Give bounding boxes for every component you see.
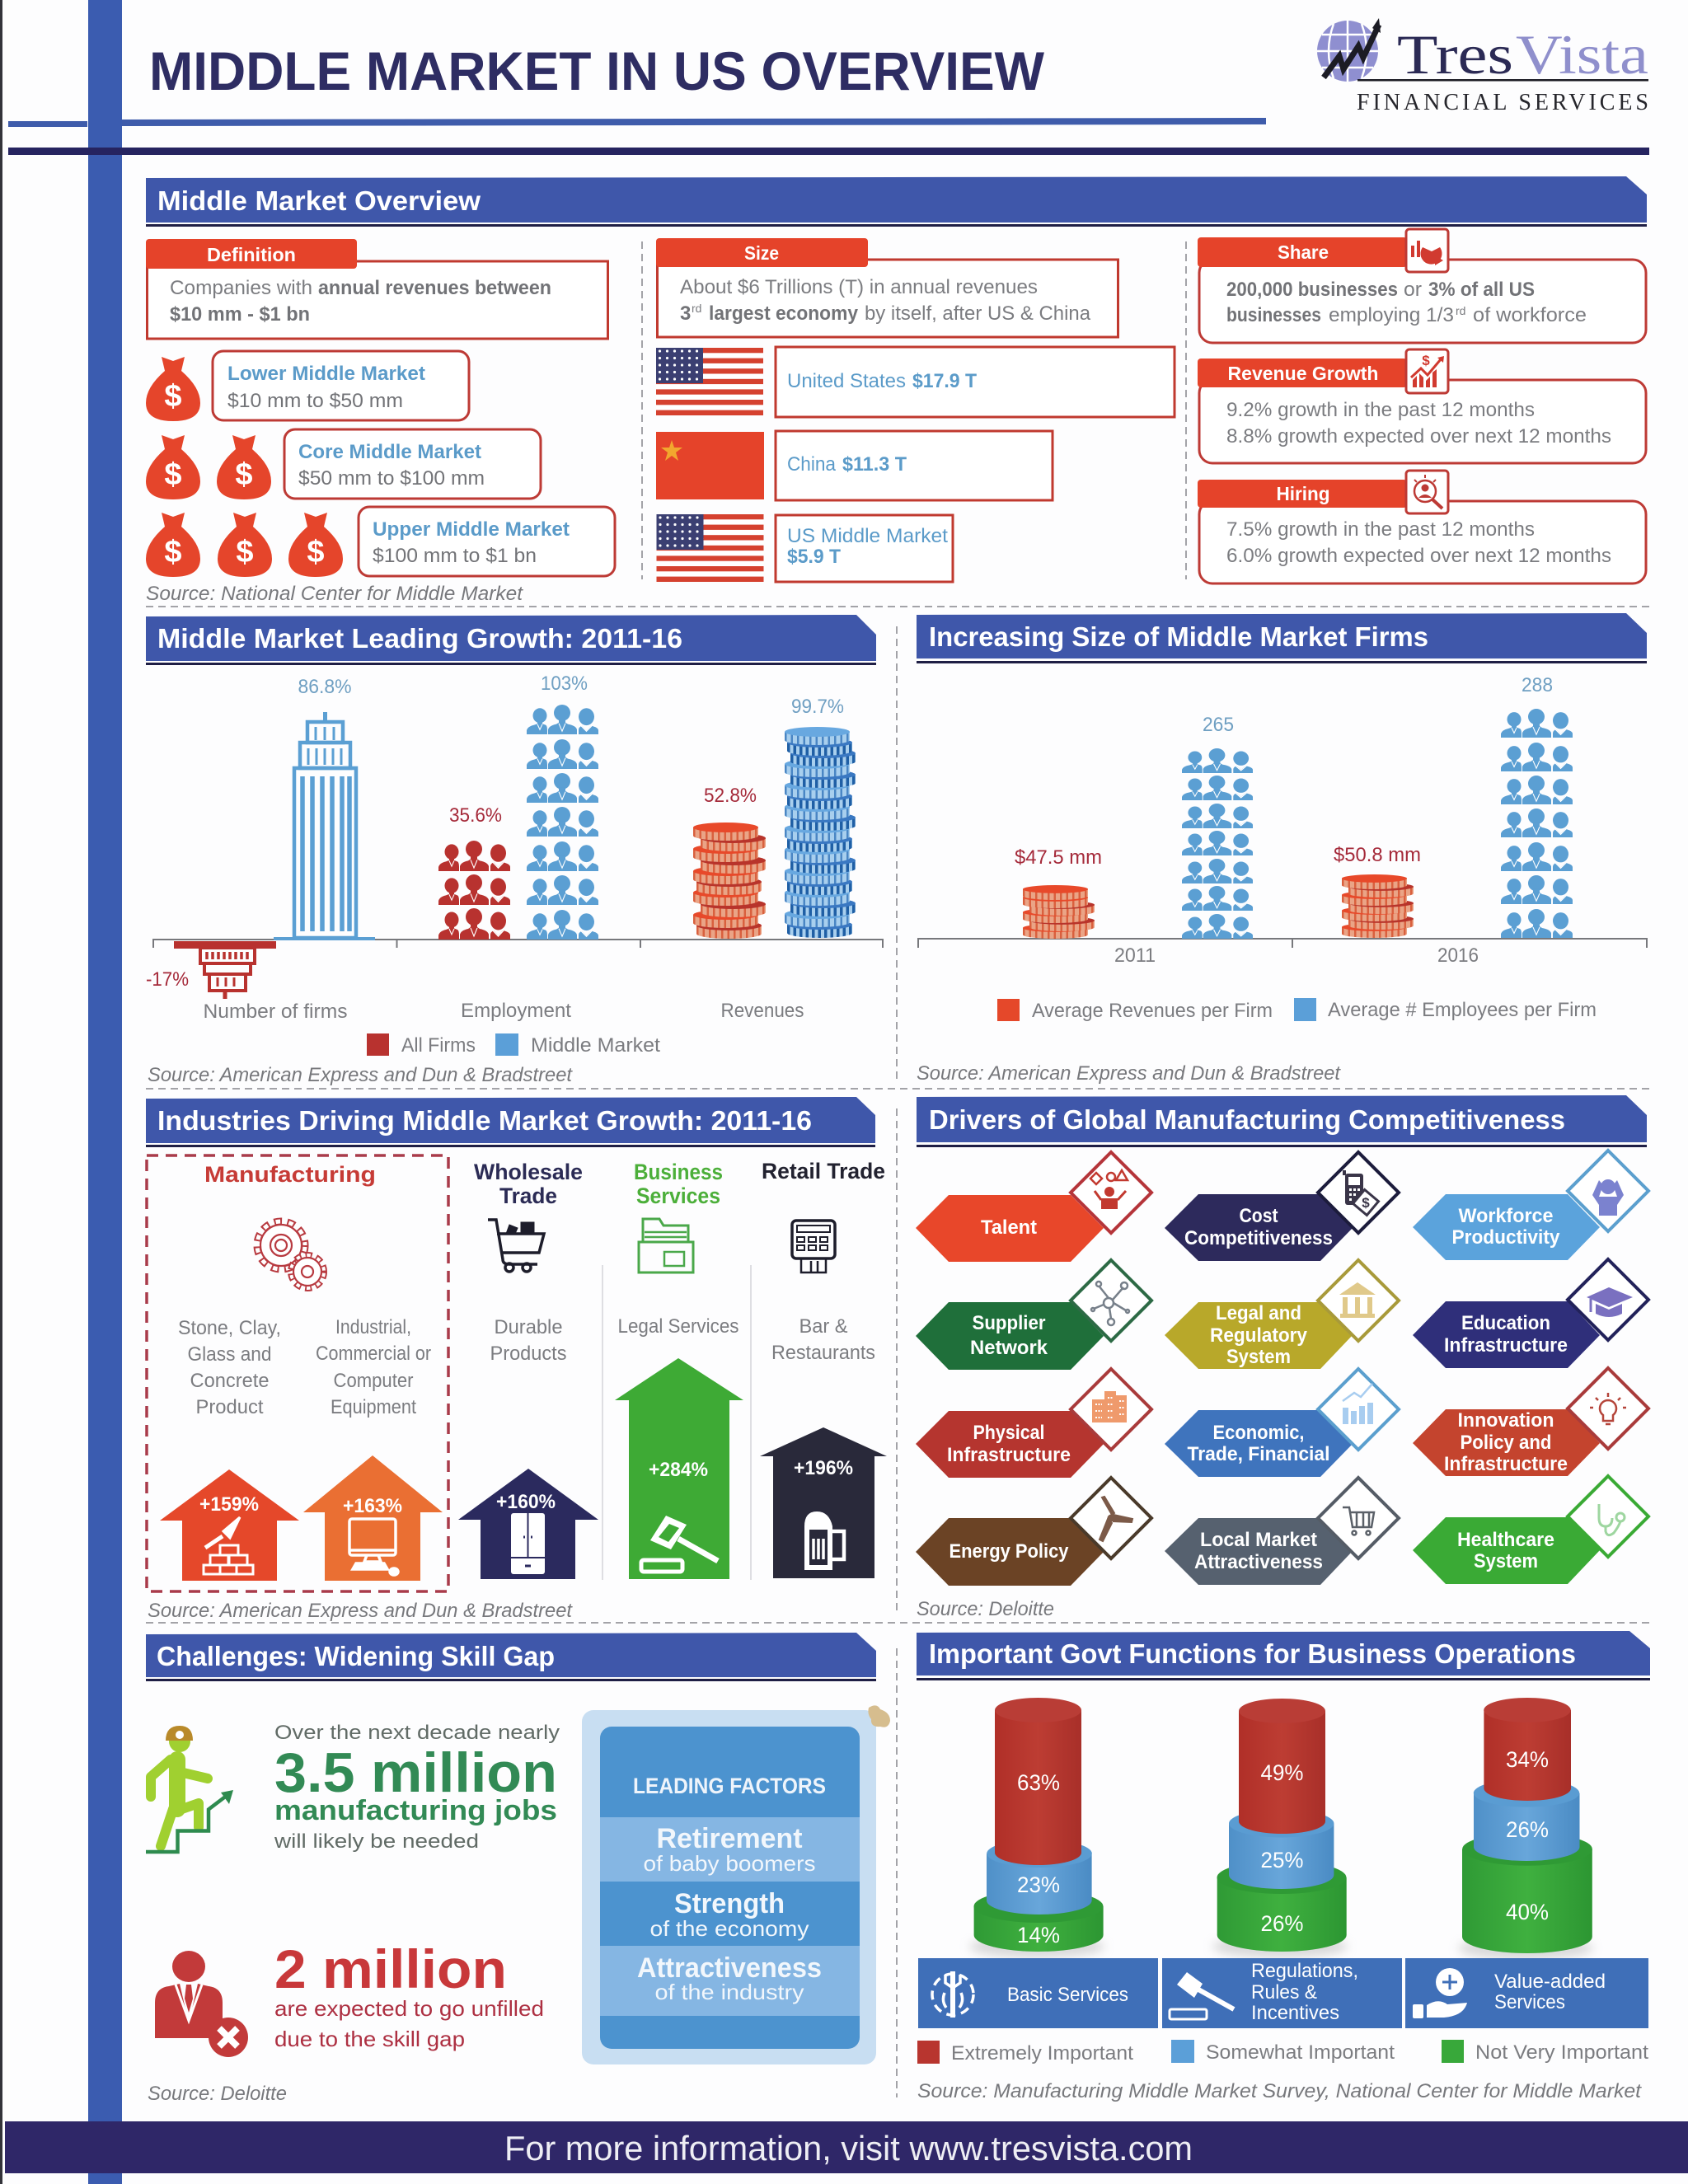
panel: size: largest economy — [709, 302, 859, 325]
panel: size — [656, 238, 1118, 337]
source: Source: Deloitte — [148, 2083, 287, 2105]
text block: 3.5 million jobs: will likely be needed — [274, 1830, 479, 1853]
panel: revenue growth: 8.8% growth expected over next 12 months — [1226, 425, 1611, 448]
panel: hiring: 6.0% growth expected over next 12 months — [1226, 545, 1611, 567]
text block: 2 million unfilled — [274, 1938, 544, 2051]
section: Middle Market Overview — [146, 176, 1647, 605]
heading: Business Services — [634, 1160, 723, 1208]
label: Regulations, Rules and Incentives — [1162, 1958, 1402, 2028]
driver: Talent — [916, 1152, 1151, 1262]
panel: leading factors: Attractiveness — [637, 1952, 822, 1984]
driver: Legal and Regulatory System — [1165, 1260, 1399, 1369]
panel: core middle market: $50 mm to $100 mm — [298, 467, 485, 490]
chart: Regulations stacked cylinders: 26% — [1261, 1911, 1304, 1936]
panel: size: by itself, after US & China — [865, 302, 1091, 325]
panel: share — [1198, 229, 1646, 343]
driver: Workforce Productivity — [1413, 1151, 1648, 1260]
legend: Somewhat Important — [1206, 2041, 1395, 2064]
driver: Workforce Productivity: Workforce — [1459, 1205, 1553, 1227]
category labels — [203, 1000, 804, 1023]
panel: share: Share — [1278, 241, 1329, 263]
text block: 3.5 million jobs: manufacturing jobs — [274, 1795, 557, 1826]
panel: upper middle market — [146, 507, 615, 577]
banner: Industries — [146, 1097, 875, 1147]
icon: globe with arrow — [1317, 18, 1381, 82]
panel: leading factors: of the economy — [649, 1916, 809, 1941]
panel: share: 3% of all US — [1428, 279, 1535, 301]
section: Increasing Size of Middle Market Firms — [917, 613, 1647, 1085]
panel: lower middle market: $10 mm to $50 mm — [227, 390, 403, 412]
icon: graduation cap — [1587, 1287, 1633, 1317]
driver: Legal and Regulatory System: Legal and — [1216, 1302, 1301, 1324]
panel: share: of workforce — [1473, 304, 1587, 326]
legend: All Firms — [401, 1034, 476, 1057]
heading: Wholesale Trade: Trade — [499, 1183, 557, 1208]
label: Value-added Services: Services — [1494, 1991, 1565, 2013]
text block: Stone, Clay, Glass and Concrete Product: Stone, Clay, — [178, 1317, 281, 1339]
driver: Education Infrastructure: Infrastructure — [1444, 1334, 1568, 1357]
panel: share: 200,000 businesses — [1226, 279, 1398, 301]
arrow: +159% — [160, 1469, 299, 1581]
panel: leading factors — [582, 1710, 876, 2064]
arrow: +284% — [615, 1358, 743, 1579]
icon: beer mug — [804, 1511, 844, 1570]
arrow: +160%: +160% — [496, 1491, 556, 1513]
pictogram: all firms revenue coins — [693, 823, 766, 939]
value label: 52.8% — [704, 785, 757, 807]
icon: card terminal — [792, 1221, 835, 1272]
panel: upper middle market: $ — [236, 535, 254, 569]
icon: inverted red building (-17%) — [176, 943, 274, 999]
value label: -17% — [146, 968, 189, 991]
panel: lower middle market — [146, 351, 469, 421]
panel: US Middle Market GDP: $5.9 T — [787, 546, 841, 568]
icon: grocery cart — [1343, 1507, 1374, 1535]
heading: Wholesale Trade — [474, 1160, 583, 1208]
value label: 86.8% — [298, 676, 351, 698]
icon: magnifier person — [1406, 471, 1448, 513]
section: Important Govt Functions for Business Operations — [917, 1631, 1650, 2102]
chart axis — [153, 940, 883, 948]
section: Middle Market Leading Growth chart — [146, 615, 883, 1086]
panel: hiring — [1198, 471, 1646, 583]
label: Value-added Services — [1405, 1958, 1648, 2028]
pictogram: middle market revenue coins — [785, 727, 856, 938]
panel: core middle market: $ — [235, 457, 253, 492]
label: Regulations, Rules and Incentives: Incentives — [1251, 2002, 1339, 2024]
pictogram: 2016 revenue coins — [1342, 874, 1414, 938]
title: MIDDLE MARKET IN US OVERVIEW — [149, 40, 1045, 101]
text block: Industrial, Commercial or Computer Equipment: Equipment — [331, 1396, 416, 1418]
text block: Bar and Restaurants: Bar & — [799, 1315, 847, 1338]
arrow: +196% — [760, 1427, 887, 1578]
panel: leading factors: of the industry — [654, 1980, 804, 2004]
panel: leading factors: Retirement — [656, 1823, 803, 1854]
panel: hiring: 7.5% growth in the past 12 months — [1226, 518, 1535, 541]
text block: Industrial, Commercial or Computer Equipment: Computer — [333, 1370, 414, 1392]
panel: size: rd — [692, 302, 701, 315]
icon: wind turbine — [1100, 1497, 1132, 1541]
banner: Middle Market Leading Growth — [146, 615, 876, 665]
panel: hiring: Hiring — [1276, 483, 1330, 504]
driver: Economic, Trade, Financial: Economic, — [1213, 1422, 1304, 1444]
icon: stressed worker — [1592, 1179, 1624, 1216]
icon: folder — [639, 1219, 693, 1272]
icon: gears — [257, 1221, 324, 1288]
banner: Drivers — [917, 1095, 1647, 1147]
driver: Legal and Regulatory System: System — [1226, 1346, 1291, 1368]
heading: Wholesale Trade: Wholesale — [474, 1160, 583, 1184]
panel: upper middle market: $100 mm to $1 bn — [373, 545, 537, 567]
icon: gavel — [641, 1516, 718, 1572]
header blue rule — [8, 118, 1266, 127]
chart: Basic Services stacked cylinders — [974, 1698, 1104, 1952]
driver: Workforce Productivity: Productivity — [1452, 1226, 1560, 1249]
driver: Cost Competitiveness — [1165, 1152, 1399, 1261]
icon: office buildings — [1092, 1391, 1127, 1422]
icon: growth chart: $ — [1422, 353, 1430, 368]
banner: Drivers: Drivers of Global Manufacturing Competitiveness — [929, 1104, 1565, 1135]
icon: phone and dollar — [1343, 1170, 1378, 1215]
source: Source: National Center for Middle Market — [146, 583, 523, 605]
panel: core middle market — [146, 429, 541, 499]
value label: 35.6% — [449, 804, 502, 827]
section: Industries Driving Middle Market Growth — [146, 1097, 887, 1622]
banner: Challenges: Challenges: Widening Skill Gap — [157, 1641, 555, 1671]
driver: Local Market Attractiveness: Local Market — [1200, 1529, 1317, 1551]
arrow: +163%: +163% — [343, 1495, 402, 1517]
panel: core middle market: $ — [164, 457, 182, 492]
arrow: +163% — [303, 1455, 443, 1581]
value labels: $50.8 mm — [1334, 844, 1421, 866]
banner: Middle Market Overview: Middle Market Overview — [157, 185, 481, 216]
driver: Innovation Policy and Infrastructure: Policy and — [1461, 1432, 1551, 1454]
driver: Cost Competitiveness: Competitiveness — [1184, 1227, 1333, 1249]
panel: China GDP: $11.3 T — [842, 453, 907, 476]
driver: Supplier Network: Supplier — [973, 1312, 1045, 1334]
panel: revenue growth: Revenue Growth — [1228, 363, 1378, 384]
chart: Basic Services stacked cylinders: 14% — [1017, 1923, 1060, 1947]
year labels: 2011 — [1114, 944, 1156, 967]
text block: 2 million unfilled: 2 million — [274, 1938, 507, 1999]
driver: Physical Infrastructure: Physical — [973, 1422, 1045, 1444]
panel: United States GDP: $17.9 T — [912, 370, 977, 392]
driver: Education Infrastructure: Education — [1461, 1312, 1550, 1334]
panel: US Middle Market GDP — [656, 514, 953, 582]
panel: leading factors: of baby boomers — [643, 1851, 816, 1876]
text block: Stone, Clay, Glass and Concrete Product: Glass and — [188, 1343, 272, 1366]
icon: gavel — [1170, 1972, 1234, 2019]
legend — [917, 2040, 1648, 2064]
logo wordmark: Tres — [1397, 23, 1513, 86]
text block: Durable Products: Durable — [495, 1316, 562, 1338]
text block: Bar and Restaurants — [771, 1315, 875, 1364]
driver: Economic, Trade, Financial: Trade, Financial — [1187, 1443, 1330, 1465]
section: Drivers of Global Manufacturing Competitiveness — [916, 1095, 1648, 1620]
icon: pie chart — [1406, 229, 1448, 272]
panel: share: rd — [1456, 304, 1465, 317]
panel: China GDP: China — [787, 453, 837, 476]
panel: core middle market: Core Middle Market — [298, 441, 481, 463]
chart: Value-added stacked cylinders: 26% — [1506, 1817, 1549, 1842]
panel: size: Size — [744, 242, 779, 264]
manufacturing dashed frame — [147, 1155, 448, 1591]
icon: person with x — [155, 1951, 248, 2057]
text block: Bar and Restaurants: Restaurants — [771, 1342, 875, 1364]
arrow: +196%: +196% — [794, 1457, 853, 1479]
driver: Talent: Talent — [981, 1216, 1037, 1239]
text block: Durable Products: Products — [490, 1343, 567, 1365]
source: Source: American Express and Dun & Bradstreet — [917, 1062, 1341, 1085]
panel: definition: $10 mm - $1 bn — [170, 303, 310, 326]
label: Value-added Services: Value-added — [1494, 1971, 1606, 1993]
chart: Basic Services stacked cylinders: 63% — [1017, 1770, 1060, 1795]
chart axis — [918, 939, 1647, 948]
text block: Durable Products — [490, 1316, 567, 1365]
value labels: $47.5 mm — [1015, 846, 1102, 869]
panel: share: or — [1404, 279, 1422, 301]
legend: Not Very Important — [1475, 2041, 1648, 2064]
arrow: +159%: +159% — [199, 1493, 259, 1516]
logo tagline: FINANCIAL SERVICES — [1357, 90, 1649, 115]
chart: Value-added stacked cylinders — [1462, 1698, 1592, 1953]
text block: 2 million unfilled: are expected to go unfilled — [274, 1996, 544, 2021]
source: Source: Manufacturing Middle Market Survey, National Center for Middle Market — [917, 2080, 1642, 2102]
category labels: Number of firms — [203, 1001, 348, 1023]
text block: 3.5 million jobs: 3.5 million — [274, 1741, 557, 1804]
icon: network nodes — [1091, 1282, 1129, 1325]
text block: Stone, Clay, Glass and Concrete Product — [178, 1317, 281, 1418]
icon: phone and dollar: $ — [1362, 1195, 1370, 1211]
icon: growth bars — [1343, 1384, 1373, 1424]
text block: Industrial, Commercial or Computer Equipment — [316, 1316, 431, 1418]
driver: Physical Infrastructure — [916, 1369, 1151, 1478]
icon: wardrobe — [511, 1513, 545, 1574]
chart: Value-added stacked cylinders: 40% — [1506, 1900, 1549, 1924]
banner: Middle Market Overview — [146, 176, 1647, 227]
legend: Average Revenues per Firm — [1032, 1000, 1273, 1022]
banner: Increasing Size: Increasing Size of Middle Market Firms — [929, 621, 1428, 652]
value label: 99.7% — [791, 696, 844, 718]
category labels: Employment — [461, 1000, 571, 1022]
chart: Regulations stacked cylinders — [1217, 1699, 1347, 1952]
panel: leading factors: LEADING FACTORS — [633, 1774, 826, 1798]
panel: China GDP — [656, 431, 1053, 500]
icon: trowel and bricks — [204, 1517, 253, 1574]
panel: revenue growth — [1198, 349, 1646, 463]
pictogram: middle market employment — [527, 705, 598, 940]
arrow: +160% — [458, 1469, 598, 1579]
panel: definition — [146, 239, 608, 339]
driver: Legal and Regulatory System: Regulatory — [1210, 1324, 1308, 1347]
banner: Govt Functions — [917, 1631, 1650, 1680]
chart: Regulations stacked cylinders: 49% — [1261, 1760, 1304, 1785]
icon: person juggling shapes — [1090, 1170, 1128, 1209]
legend: Average # Employees per Firm — [1328, 999, 1597, 1021]
banner: Increasing Size — [917, 613, 1647, 663]
arrow: +284%: +284% — [649, 1459, 708, 1481]
year labels: 2016 — [1437, 944, 1479, 967]
label: Basic Services — [918, 1958, 1158, 2028]
panel: share: employing 1/3 — [1329, 304, 1454, 326]
driver: Supplier Network: Network — [970, 1337, 1048, 1359]
vertical blue page bar — [88, 0, 122, 2184]
left page edge — [0, 0, 2, 2184]
panel: United States GDP — [656, 347, 1175, 417]
icon: bank building — [1339, 1282, 1376, 1318]
chart: Value-added stacked cylinders: 34% — [1506, 1747, 1549, 1772]
panel: lower middle market: Lower Middle Market — [227, 363, 425, 385]
section: Challenges: Widening Skill Gap — [146, 1633, 890, 2105]
banner: Govt Functions: Important Govt Functions for Business Operations — [929, 1638, 1576, 1669]
driver: Healthcare System: Healthcare — [1457, 1529, 1554, 1551]
panel: leading factors: Strength — [674, 1888, 785, 1919]
icon: growth chart — [1406, 349, 1448, 393]
text block: Stone, Clay, Glass and Concrete Product: Concrete — [190, 1370, 269, 1392]
heading: Manufacturing: Manufacturing — [204, 1162, 376, 1187]
legend — [367, 1033, 660, 1057]
heading: Business Services: Services — [636, 1183, 720, 1208]
driver: Local Market Attractiveness: Attractiveness — [1194, 1551, 1323, 1573]
legend — [997, 998, 1597, 1022]
banner: Industries: Industries Driving Middle Market Growth: 2011-16 — [157, 1105, 812, 1136]
legend: Extremely Important — [951, 2042, 1133, 2064]
year labels — [1114, 944, 1479, 967]
footer: For more information, visit www.tresvista.com — [504, 2129, 1193, 2168]
panel: upper middle market: $ — [307, 535, 325, 569]
value label: 103% — [541, 673, 588, 695]
heading: Business Services: Business — [634, 1160, 723, 1184]
text block: 3.5 million jobs: Over the next decade nearly — [274, 1722, 560, 1744]
panel: upper middle market: Upper Middle Market — [373, 518, 570, 541]
driver: Innovation Policy and Infrastructure: Infrastructure — [1444, 1453, 1568, 1475]
driver: Economic, Trade, Financial — [1165, 1369, 1399, 1477]
icon: hand with plus — [1413, 1968, 1467, 2018]
panel: size: 3 — [680, 302, 691, 325]
panel: United States GDP: United States — [787, 370, 906, 392]
driver: Energy Policy: Energy Policy — [950, 1540, 1069, 1563]
driver: Innovation Policy and Infrastructure — [1413, 1368, 1648, 1476]
driver: Supplier Network — [916, 1260, 1151, 1370]
driver: Education Infrastructure — [1413, 1259, 1648, 1368]
panel: revenue growth: 9.2% growth in the past 12 months — [1226, 399, 1535, 421]
banner: Middle Market Leading Growth: Middle Market Leading Growth: 2011-16 — [157, 623, 682, 654]
panel: US Middle Market GDP: US Middle Market — [787, 525, 948, 547]
value labels: 265 — [1203, 714, 1234, 736]
pictogram: 2016 employees — [1501, 709, 1573, 938]
banner: Challenges — [146, 1633, 876, 1681]
header navy rule — [8, 148, 1649, 155]
logo: TresVista — [1317, 18, 1649, 115]
driver: Energy Policy — [916, 1478, 1151, 1586]
panel: definition: Definition — [207, 244, 296, 265]
driver: Healthcare System — [1413, 1476, 1648, 1584]
category labels: Revenues — [720, 1000, 804, 1022]
text block: 3.5 million jobs — [274, 1722, 560, 1853]
icon: gear and wrench — [932, 1971, 973, 2018]
icon: blue skyscraper (86.8%) — [274, 712, 375, 940]
source: Source: Deloitte — [917, 1598, 1054, 1620]
label: Regulations, Rules and Incentives: Rules & — [1251, 1981, 1317, 2004]
icon: light bulb — [1590, 1393, 1626, 1424]
text block: Stone, Clay, Glass and Concrete Product: Product — [196, 1396, 264, 1418]
pictogram: 2011 revenue coins — [1023, 885, 1095, 939]
driver: Healthcare System: System — [1474, 1550, 1538, 1572]
panel: lower middle market: $ — [164, 379, 182, 414]
logo wordmark second part: Vista — [1516, 23, 1648, 86]
pictogram: 2011 employees — [1182, 748, 1253, 939]
heading: Retail Trade: Retail Trade — [762, 1159, 885, 1183]
text block: Legal Services: Legal Services — [618, 1315, 738, 1338]
pictogram: all firms employment — [438, 841, 510, 940]
driver: Physical Infrastructure: Infrastructure — [947, 1444, 1071, 1466]
source: Source: American Express and Dun & Bradstreet — [148, 1064, 573, 1086]
chart: Basic Services stacked cylinders: 23% — [1017, 1872, 1060, 1897]
text block: 2 million unfilled: due to the skill gap — [274, 2027, 465, 2051]
panel: size: About $6 Trillions (T) in annual revenues — [680, 276, 1038, 298]
value labels: 288 — [1522, 674, 1553, 696]
icon: stethoscope — [1599, 1504, 1625, 1535]
label: Regulations, Rules and Incentives: Regulations, — [1251, 1960, 1358, 1982]
panel: share: businesses — [1226, 304, 1321, 326]
value labels — [1015, 674, 1553, 869]
driver: Local Market Attractiveness — [1165, 1478, 1399, 1585]
icon: shopping cart — [488, 1220, 544, 1272]
label: Basic Services: Basic Services — [1007, 1984, 1128, 2006]
icon: worker climbing stairs — [146, 1726, 233, 1852]
driver: Innovation Policy and Infrastructure: Innovation — [1457, 1409, 1554, 1432]
driver: Cost Competitiveness: Cost — [1240, 1205, 1278, 1227]
footer — [5, 2121, 1688, 2173]
text block: Industrial, Commercial or Computer Equipment: Industrial, — [335, 1316, 411, 1338]
panel: definition: annual revenues between — [318, 277, 551, 299]
chart: Regulations stacked cylinders: 25% — [1261, 1848, 1304, 1872]
panel: definition: Companies with — [170, 277, 312, 299]
text block: Industrial, Commercial or Computer Equipment: Commercial or — [316, 1343, 431, 1365]
panel: upper middle market: $ — [164, 535, 182, 569]
source: Source: American Express and Dun & Bradstreet — [148, 1600, 573, 1622]
legend: Middle Market — [531, 1034, 660, 1057]
icon: desktop computer — [349, 1519, 398, 1575]
